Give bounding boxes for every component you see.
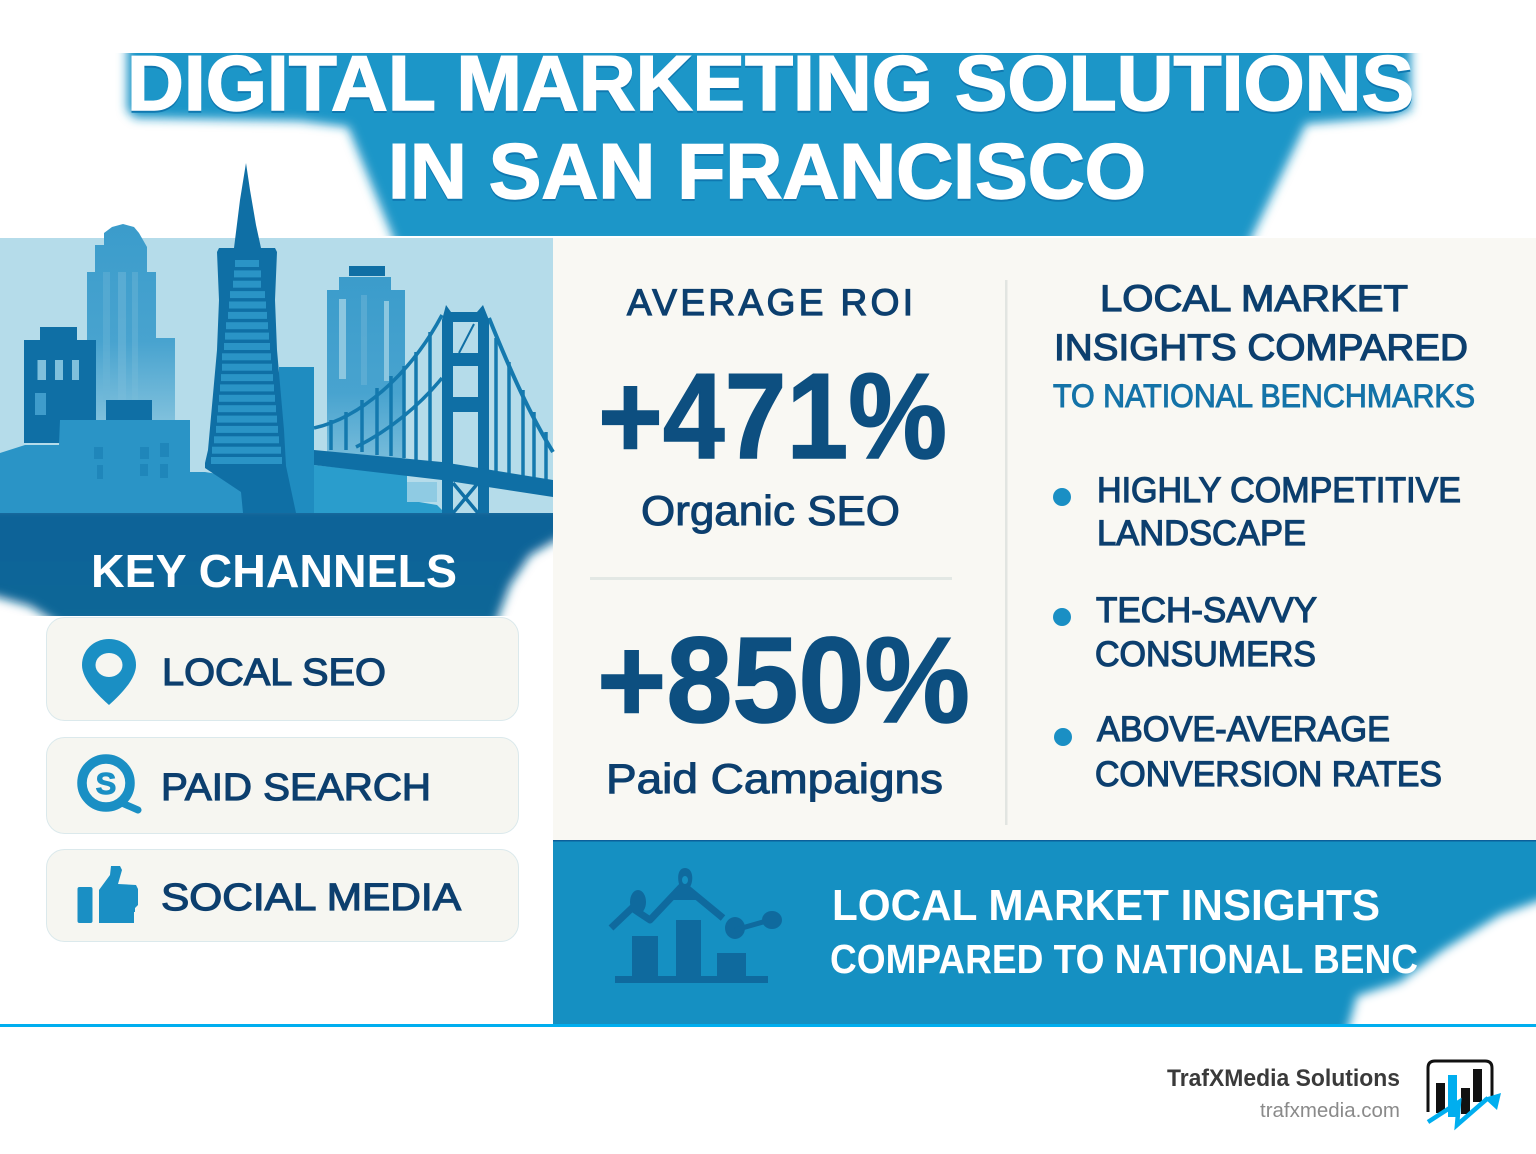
stat: +850%: +850%: [597, 612, 970, 748]
heading: average ROI: AVERAGE ROI: [627, 282, 913, 323]
title banner: [118, 53, 1420, 236]
panel: local market insights banner: [553, 840, 1536, 1040]
bullet: tech-savvy consumers: CONSUMERS: [1095, 635, 1316, 674]
bullet: highly competitive landscape: HIGHLY COMPETITIVE: [1097, 471, 1461, 510]
heading: local market insights: LOCAL MARKET: [1100, 278, 1408, 319]
heading: key channels: KEY CHANNELS: [91, 545, 457, 597]
icon: thumbs up: [78, 866, 138, 923]
label: paid search: PAID SEARCH: [161, 767, 431, 809]
bullet: tech-savvy consumers: TECH-SAVVY: [1096, 591, 1317, 630]
panel: key channels heading band: [0, 513, 553, 616]
bullet: above-average conversion rates: [1054, 710, 1442, 794]
bullet: highly competitive landscape: LANDSCAPE: [1097, 514, 1306, 553]
card: paid search: [46, 738, 518, 834]
title text: IN SAN FRANCISCO: [388, 127, 1146, 215]
label: organic SEO: Organic SEO: [641, 487, 900, 534]
heading: local market insights: INSIGHTS COMPARED: [1054, 327, 1468, 368]
icon: Golden Gate bridge: [314, 305, 553, 513]
heading: local market insights: TO NATIONAL BENCHMARKS: [1053, 378, 1475, 414]
bullet: above-average conversion rates: ABOVE-AVERAGE: [1097, 710, 1390, 749]
panel: cream statistics background: [553, 238, 1536, 840]
label: paid campaigns: Paid Campaigns: [606, 755, 943, 802]
stat: +471%: +471%: [598, 348, 947, 484]
brand url: trafxmedia.com: [1260, 1100, 1400, 1122]
card: social media: [46, 850, 518, 942]
panel: local market insights: [1053, 278, 1475, 794]
bullet: highly competitive landscape: [1053, 471, 1461, 553]
icon: chart with trend line: [611, 868, 782, 983]
brand name: TrafXMedia Solutions: [1167, 1065, 1400, 1092]
icon: search with dollar: [82, 759, 138, 810]
icon: location pin: [82, 639, 136, 705]
bullet: above-average conversion rates: CONVERSION RATES: [1095, 755, 1442, 794]
text: banner heading: COMPARED TO NATIONAL BENC: [830, 936, 1418, 982]
footer branding: [1167, 1061, 1501, 1125]
illustration: San Francisco skyline: [0, 163, 553, 513]
icon: logo with bars and arrow: [1428, 1061, 1501, 1125]
label: social media: SOCIAL MEDIA: [161, 877, 462, 919]
heading: local market insights: [1053, 278, 1475, 414]
icon: Transamerica pyramid: [205, 163, 296, 513]
title text: [127, 39, 1414, 215]
card: local SEO: [46, 618, 518, 720]
icon: search with dollar: S: [96, 766, 116, 801]
panel: average ROI: [590, 282, 970, 802]
text: banner heading: [830, 881, 1418, 982]
bullet: tech-savvy consumers: [1053, 591, 1317, 674]
text: banner heading: LOCAL MARKET INSIGHTS: [832, 881, 1380, 930]
label: local SEO: LOCAL SEO: [162, 652, 386, 694]
title text: DIGITAL MARKETING SOLUTIONS: [127, 39, 1414, 127]
